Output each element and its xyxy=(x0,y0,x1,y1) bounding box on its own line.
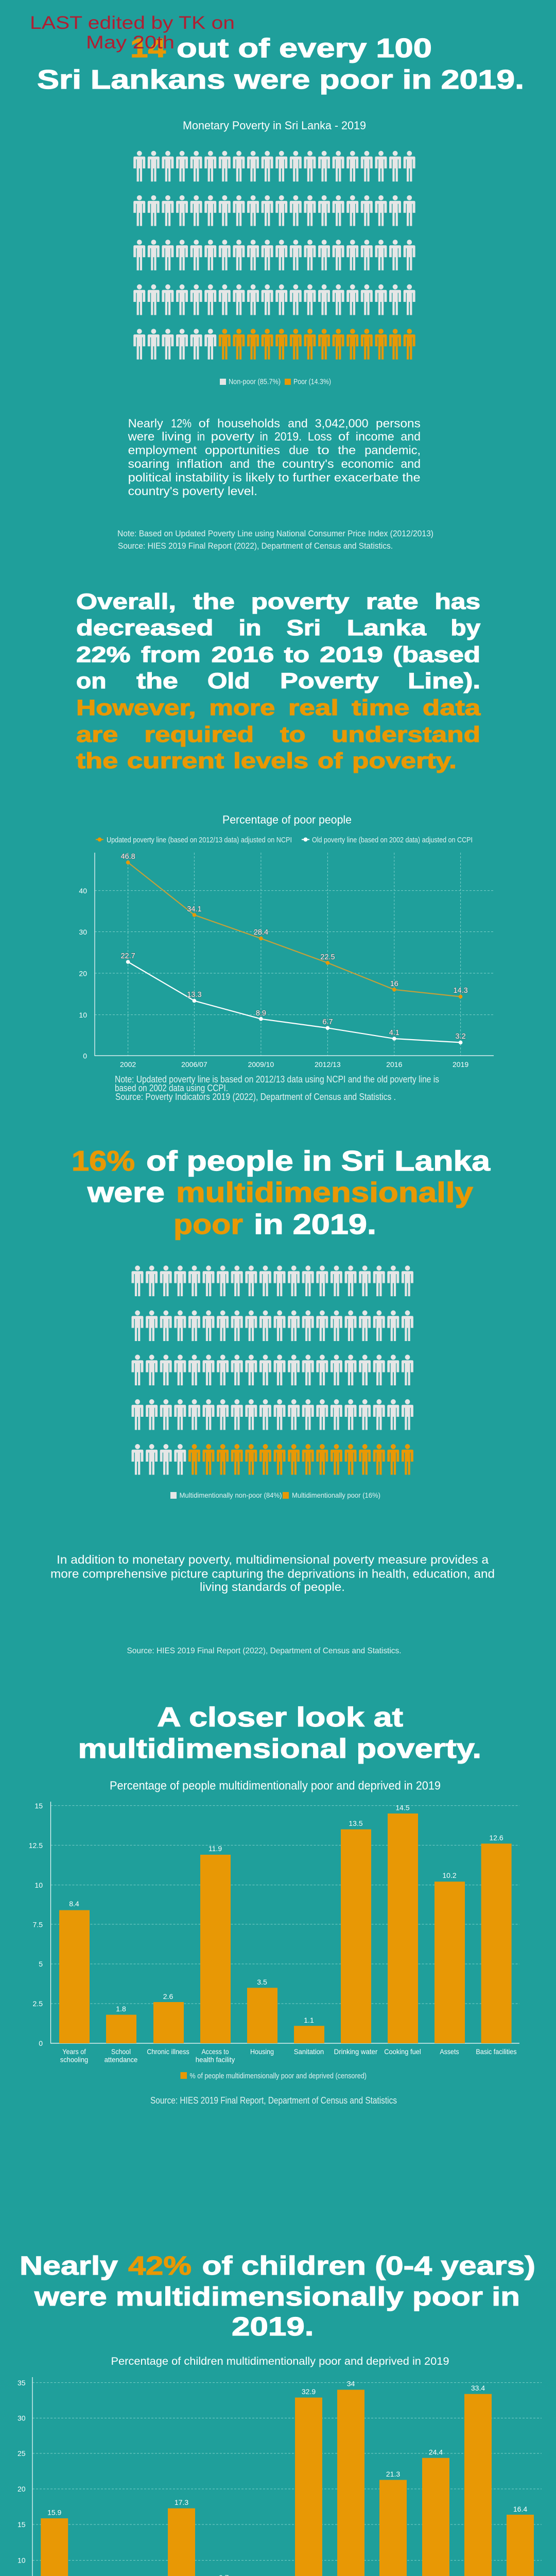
heading: poverty rate decreased: Old xyxy=(207,669,250,693)
bar values: 14.5 xyxy=(395,1803,410,1811)
y axis labels: 10 xyxy=(79,1011,87,1019)
body text: households in poverty: the xyxy=(338,444,356,457)
series: updated poverty line: 14.3 xyxy=(453,987,468,995)
heading: poverty rate decreased: data xyxy=(423,696,481,720)
y axis labels: 30 xyxy=(79,928,87,936)
chart title: Monetary Poverty in Sri Lanka - 2019 xyxy=(183,119,366,132)
category labels: Drinking water xyxy=(334,2047,378,2056)
bar values: 34 xyxy=(347,2379,355,2387)
heading: poverty rate decreased: poverty xyxy=(251,589,349,614)
note and source: based on 2002 data using CCPI. xyxy=(115,1083,228,1093)
note and source: Note: Updated poverty line is based on 2012/13 data using NCPI and the old poverty line is xyxy=(115,1074,439,1084)
source: Source: HIES 2019 Final Report (2022), Department of Census and Statistics. xyxy=(127,1647,402,1655)
category labels: Access to xyxy=(202,2047,229,2056)
pictogram: 100 people xyxy=(133,151,415,360)
body text: households in poverty: country's poverty level. xyxy=(128,484,257,498)
y axis labels xyxy=(29,1802,43,2047)
line chart legend xyxy=(96,836,473,844)
y axis labels: 2.5 xyxy=(33,1999,43,2008)
bar values: 17.3 xyxy=(175,2498,188,2506)
body text: households in poverty: Loss xyxy=(308,430,332,443)
source: Source: HIES 2019 Final Report, Department of Census and Statistics xyxy=(150,2095,397,2106)
heading: 16% multidimensionally poor: poor xyxy=(173,1208,243,1240)
heading: poverty rate decreased: Overall, xyxy=(76,589,176,614)
heading: poverty rate decreased: more xyxy=(209,696,275,720)
line chart xyxy=(79,836,494,1069)
bar values: 8.4 xyxy=(69,1900,79,1908)
body text: households in poverty: of xyxy=(199,417,210,430)
body text: households in poverty: and xyxy=(401,430,421,443)
y axis labels: 20 xyxy=(18,2485,26,2493)
body text: households in poverty: income xyxy=(356,430,394,443)
x axis labels: 2006/07 xyxy=(181,1060,207,1069)
x axis labels xyxy=(120,1060,468,1069)
body text: households in poverty: poverty xyxy=(211,430,254,443)
heading: poverty rate decreased: time xyxy=(352,696,409,720)
y axis labels xyxy=(79,887,87,1060)
chart title: Percentage of people multidimentionally poor and deprived in 2019 xyxy=(110,1778,441,1792)
bar values: 10.2 xyxy=(442,1871,457,1879)
y axis labels: 15 xyxy=(18,2520,26,2529)
bar values: 1.1 xyxy=(304,2016,314,2024)
category labels: Basic facilities xyxy=(476,2047,517,2056)
heading: 42% of children: were multidimensionally poor in xyxy=(34,2282,520,2311)
heading: 16% multidimensionally poor: 16% xyxy=(72,1145,135,1177)
heading: poverty rate decreased: 22% xyxy=(76,642,130,667)
series: old poverty line: 6.7 xyxy=(322,1018,333,1026)
series: old poverty line: 22.7 xyxy=(120,952,135,960)
body text: households in poverty: households xyxy=(217,417,280,430)
heading: poverty rate decreased: levels xyxy=(233,749,308,773)
heading: poverty rate decreased: (based xyxy=(393,642,480,667)
heading: poverty rate decreased: rate xyxy=(366,589,419,614)
panel: children xyxy=(18,2251,543,2576)
bar values: 32.9 xyxy=(302,2387,316,2396)
x axis labels: 2012/13 xyxy=(315,1060,341,1069)
heading: poverty rate decreased: real xyxy=(288,696,339,720)
panel: closer look xyxy=(29,1702,519,2106)
body text: households in poverty: 2019. xyxy=(274,430,302,443)
series: updated poverty line: 28.4 xyxy=(254,928,268,937)
heading: 14 out of every 100: Sri Lankans were poor in 2019. xyxy=(37,65,524,95)
x axis labels: 2016 xyxy=(386,1060,403,1069)
heading: poverty rate decreased: However, xyxy=(76,696,196,720)
heading: a closer look: A closer look at xyxy=(157,1702,403,1733)
series: updated poverty line: 46.8 xyxy=(120,853,135,861)
body text: multidimensional measure: living standards of people. xyxy=(200,1580,345,1594)
category labels xyxy=(60,2047,517,2064)
y axis labels: 7.5 xyxy=(33,1921,43,1929)
bar values: 21.3 xyxy=(386,2470,400,2478)
body text: households in poverty: persons xyxy=(376,417,421,430)
y axis labels: 12.5 xyxy=(29,1841,43,1850)
x axis labels: 2009/10 xyxy=(248,1060,274,1069)
x axis labels: 2002 xyxy=(120,1060,136,1069)
pictogram legend: Multidimentionally non-poor (84%) xyxy=(179,1491,282,1499)
y axis labels xyxy=(18,2379,26,2576)
y axis labels: 0 xyxy=(83,1052,87,1060)
heading: poverty rate decreased: to xyxy=(284,642,309,667)
pictogram legend: Non-poor (85.7%) xyxy=(229,377,281,386)
category labels: health facility xyxy=(196,2056,235,2064)
pictogram: 100 people xyxy=(132,1265,413,1475)
bar values: 33.4 xyxy=(471,2384,485,2392)
heading: poverty rate decreased: the xyxy=(76,749,118,773)
series: old poverty line: 3.2 xyxy=(456,1032,466,1041)
y axis labels: 40 xyxy=(79,887,87,895)
y axis labels: 15 xyxy=(34,1802,43,1810)
heading: 42% of children: of children (0-4 years) xyxy=(202,2251,535,2280)
bar values: 16.4 xyxy=(513,2505,527,2513)
category labels: Chronic illness xyxy=(147,2047,189,2056)
category labels: schooling xyxy=(60,2056,88,2064)
category labels: Cooking fuel xyxy=(384,2047,421,2056)
series: old poverty line xyxy=(120,952,466,1044)
body text: households in poverty: in xyxy=(197,430,205,443)
y axis labels: 10 xyxy=(34,1881,43,1889)
bar values xyxy=(47,2379,527,2576)
bar chart: people deprived xyxy=(29,1802,519,2080)
heading: poverty rate decreased: in xyxy=(239,616,262,640)
series: updated poverty line xyxy=(120,853,468,998)
body text: households in poverty: due xyxy=(289,444,309,457)
chart title: Percentage of children multidimentionally poor and deprived in 2019 xyxy=(111,2355,449,2367)
line chart legend: Updated poverty line (based on 2012/13 data) adjusted on NCPI xyxy=(107,836,292,844)
series: old poverty line: 13.3 xyxy=(187,991,202,999)
heading: poverty rate decreased: the xyxy=(193,589,235,614)
body text: households in poverty: to xyxy=(317,444,329,457)
body text: households in poverty: political instability is likely to further exacerbate the xyxy=(128,471,421,484)
heading: 14 out of every 100: out of every 100 xyxy=(177,33,432,63)
bars xyxy=(59,1814,512,2043)
body text: households in poverty: country's xyxy=(282,457,334,470)
y axis labels: 20 xyxy=(79,970,87,978)
editor note: LAST edited by TK on xyxy=(30,13,235,33)
note and source: Note: Based on Updated Poverty Line using National Consumer Price Index (2012/2013) xyxy=(117,529,433,538)
heading: poverty rate decreased: required xyxy=(144,722,254,747)
bar chart: children deprived xyxy=(18,2377,542,2576)
heading: 42% of children: 2019. xyxy=(232,2312,314,2341)
y axis labels: 5 xyxy=(39,1960,43,1968)
body text: households in poverty: inflation xyxy=(177,457,222,470)
heading: poverty rate decreased: to xyxy=(280,722,306,747)
body text: households in poverty: opportunities xyxy=(205,444,280,457)
category labels: Sanitation xyxy=(294,2047,324,2056)
heading: 16% multidimensionally poor: of people in Sri Lanka xyxy=(146,1145,490,1177)
panel: multidimensional poverty xyxy=(50,1145,498,1655)
body text: households in poverty: economic xyxy=(341,457,393,470)
body text: households in poverty: employment xyxy=(128,444,197,457)
panel: poverty trend xyxy=(76,589,494,1102)
heading: 16% multidimensionally poor: were xyxy=(87,1176,165,1208)
note and source: Source: HIES 2019 Final Report (2022), Department of Census and Statistics. xyxy=(118,541,393,551)
body text: households in poverty: 3,042,000 xyxy=(315,417,369,430)
body text: households in poverty: soaring xyxy=(128,457,169,470)
body text: multidimensional measure: more comprehensive picture capturing the deprivations in health, education, and xyxy=(50,1567,495,1581)
body text: households in poverty: 12% xyxy=(171,417,192,430)
body text: multidimensional measure: In addition to monetary poverty, multidimensional poverty measure provides a xyxy=(57,1553,489,1566)
heading: poverty rate decreased: current xyxy=(127,749,224,773)
heading: poverty rate decreased: Sri xyxy=(286,616,321,640)
y axis labels: 10 xyxy=(18,2556,26,2565)
body text: households in poverty: and xyxy=(288,417,308,430)
heading: poverty rate decreased: are xyxy=(76,722,118,747)
y axis labels: 0 xyxy=(39,2039,43,2047)
bar values: 13.5 xyxy=(349,1819,363,1827)
bars xyxy=(41,2389,534,2576)
editor note: May 20th xyxy=(86,32,175,53)
bar values: 1.8 xyxy=(116,2005,126,2013)
line chart legend: Old poverty line (based on 2002 data) adjusted on CCPI xyxy=(312,836,473,844)
bar values: 3.5 xyxy=(257,1978,267,1986)
heading: poverty rate decreased: understand xyxy=(332,722,480,747)
heading: a closer look: multidimensional poverty. xyxy=(78,1734,481,1764)
pictogram legend: Poor (14.3%) xyxy=(293,377,331,386)
heading: poverty rate decreased: the xyxy=(136,669,178,693)
body text: households in poverty: were xyxy=(128,430,154,443)
heading: 14 out of every 100: 14 xyxy=(130,33,166,63)
bar values xyxy=(69,1803,503,2024)
heading: 16% multidimensionally poor: in 2019. xyxy=(254,1208,376,1240)
body text: households in poverty: living xyxy=(162,430,192,443)
body text: households in poverty: pandemic, xyxy=(364,444,421,457)
panel: monetary poverty xyxy=(30,13,524,551)
category labels: attendance xyxy=(105,2056,138,2064)
heading: poverty rate decreased: on xyxy=(76,669,106,693)
body text: households in poverty: in xyxy=(260,430,268,443)
heading: poverty rate decreased: has xyxy=(435,589,480,614)
heading: poverty rate decreased: of xyxy=(318,749,343,773)
series: old poverty line: 4.1 xyxy=(389,1029,399,1037)
heading: 42% of children: Nearly xyxy=(20,2251,118,2280)
bar values: 11.9 xyxy=(208,1844,222,1853)
heading: poverty rate decreased: 2019 xyxy=(320,642,383,667)
body text: households in poverty: and xyxy=(230,457,250,470)
heading: poverty rate decreased: Lanka xyxy=(347,616,427,640)
body text: households in poverty: and xyxy=(401,457,421,470)
y axis labels: 30 xyxy=(18,2414,26,2422)
series: updated poverty line: 22.5 xyxy=(320,953,335,961)
note and source: Source: Poverty Indicators 2019 (2022), Department of Census and Statistics . xyxy=(115,1092,396,1102)
body text: households in poverty: of xyxy=(338,430,350,443)
heading: poverty rate decreased: Poverty xyxy=(280,669,379,693)
pictogram legend xyxy=(170,1491,380,1499)
category labels: Housing xyxy=(250,2047,274,2056)
heading: 16% multidimensionally poor: multidimensionally xyxy=(176,1176,473,1208)
body text: households in poverty: the xyxy=(257,457,275,470)
x axis labels: 2019 xyxy=(453,1060,468,1069)
y axis labels: 25 xyxy=(18,2449,26,2458)
series: updated poverty line: 34.1 xyxy=(187,905,202,913)
body text: households in poverty: Nearly xyxy=(128,417,163,430)
heading: poverty rate decreased: poverty. xyxy=(352,749,457,773)
heading: poverty rate decreased: decreased xyxy=(76,616,213,640)
heading: poverty rate decreased: 2016 xyxy=(211,642,274,667)
chart title: Percentage of poor people xyxy=(222,813,352,826)
category labels: Assets xyxy=(440,2047,459,2056)
bar values: 12.6 xyxy=(489,1834,503,1842)
pictogram legend xyxy=(220,377,331,386)
pictogram legend: Multidimentionally poor (16%) xyxy=(292,1491,380,1499)
category labels: School xyxy=(111,2047,131,2056)
heading: poverty rate decreased: from xyxy=(141,642,201,667)
chart legend: % of people multidimensionally poor and deprived (censored) xyxy=(189,2072,367,2080)
heading: poverty rate decreased: by xyxy=(450,616,480,640)
series: old poverty line: 8.9 xyxy=(256,1009,266,1018)
heading: poverty rate decreased: Line). xyxy=(408,669,480,693)
series: updated poverty line: 16 xyxy=(390,980,398,988)
heading: 42% of children: 42% xyxy=(128,2251,192,2280)
bar values: 2.6 xyxy=(163,1992,173,2001)
bar values: 24.4 xyxy=(429,2448,443,2456)
category labels: Years of xyxy=(62,2047,86,2056)
y axis labels: 35 xyxy=(18,2379,26,2387)
bar values: 15.9 xyxy=(47,2508,62,2516)
